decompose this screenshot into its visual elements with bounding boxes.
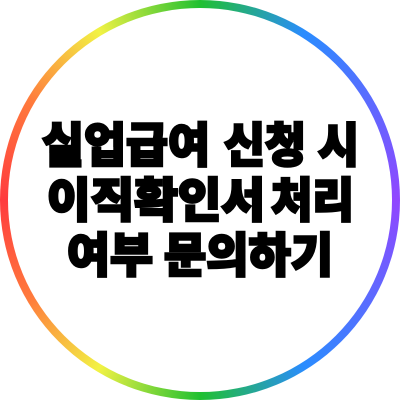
title line 1: 시 xyxy=(318,119,359,172)
title line 3: 여부 xyxy=(67,229,153,282)
title line 1: 신청 xyxy=(224,119,306,172)
title line 3: 문의하기 xyxy=(164,229,333,282)
title line 1 xyxy=(42,119,359,172)
title line 2: 처리 xyxy=(271,174,354,227)
title line 3 xyxy=(67,229,333,282)
title line 1: 실업급여 xyxy=(42,119,210,172)
title line 2: 이직확인서 xyxy=(47,174,265,227)
